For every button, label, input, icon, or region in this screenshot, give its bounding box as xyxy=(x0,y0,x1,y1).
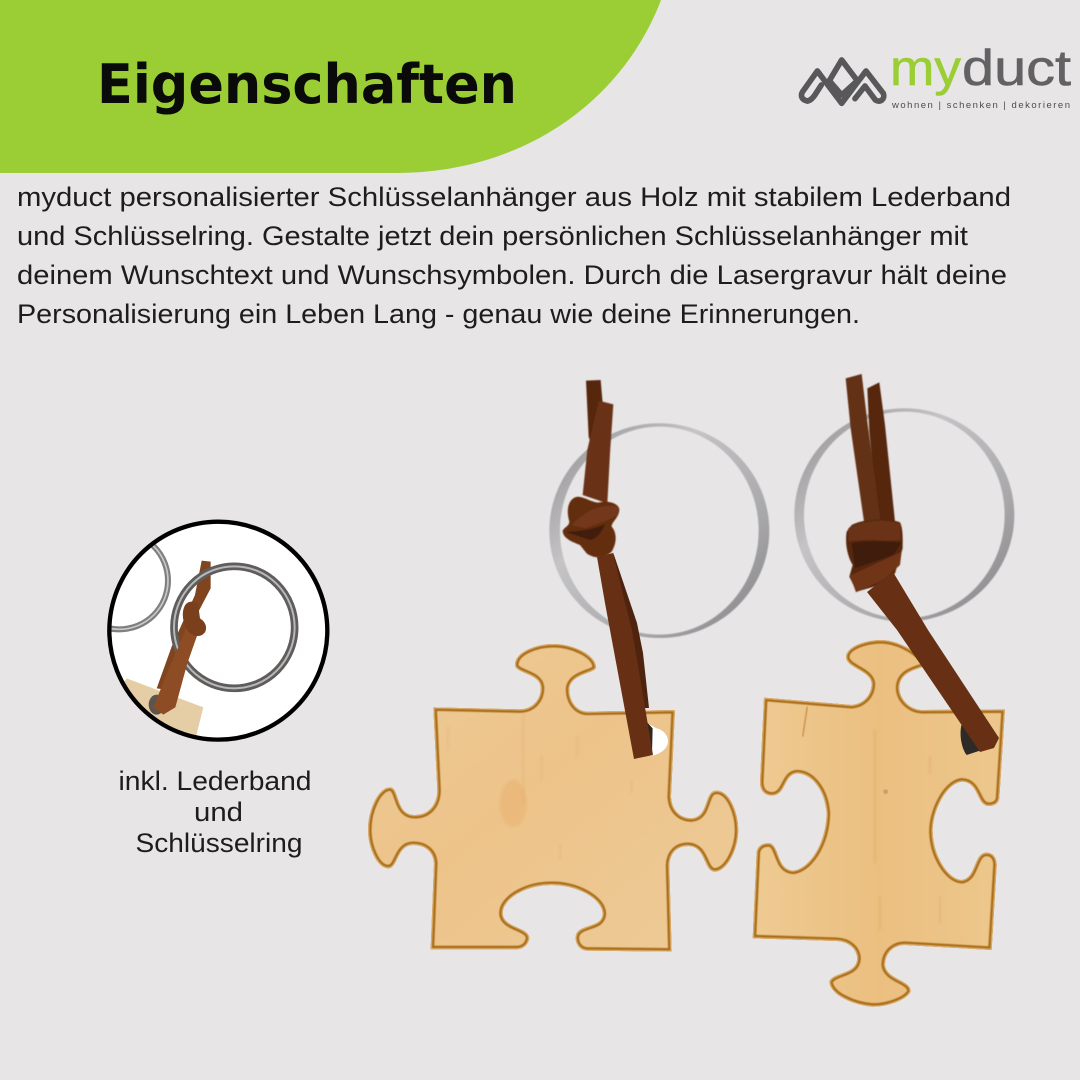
inset strap back xyxy=(157,561,211,690)
right strap behind puzzle xyxy=(885,580,955,706)
right strap front xyxy=(867,572,999,752)
description text: und Schlüsselring. Gestalte jetzt dein persönlichen Schlüsselanhänger mit xyxy=(17,221,969,251)
inset caption: und xyxy=(194,797,243,827)
title: Eigenschaften xyxy=(97,53,517,116)
description text: Personalisierung ein Leben Lang - genau wie deine Erinnerungen. xyxy=(17,299,860,329)
logo wordmark: duct xyxy=(962,40,1071,96)
left strap tails and knot xyxy=(563,380,619,557)
inset strap front xyxy=(153,628,197,715)
logo icon: mountains xyxy=(801,60,884,103)
logo tagline: wohnen | schenken | dekorieren xyxy=(891,100,1070,111)
inset main ring xyxy=(174,566,295,688)
right strap tails and knot xyxy=(846,374,903,592)
right hole xyxy=(961,718,998,755)
left puzzle piece xyxy=(368,644,738,952)
header banner: green shape xyxy=(0,0,661,173)
description text: myduct personalisierter Schlüsselanhänger aus Holz mit stabilem Lederband xyxy=(17,182,1011,212)
description text: deinem Wunschtext und Wunschsymbolen. Durch die Lasergravur hält deine xyxy=(17,260,1007,290)
left hole xyxy=(645,722,668,756)
inset left ring xyxy=(112,544,171,632)
logo wordmark xyxy=(890,40,1071,96)
left strap behind puzzle xyxy=(613,552,649,708)
right key ring xyxy=(794,408,1014,622)
right puzzle piece xyxy=(753,640,1005,1007)
wood grain xyxy=(448,713,632,860)
inset wood piece xyxy=(124,678,204,736)
inset strap knot xyxy=(183,602,206,636)
logo: myduct xyxy=(801,40,1071,111)
description text xyxy=(17,182,1011,329)
inset wood hole xyxy=(148,694,161,715)
inset caption: inkl. Lederband xyxy=(118,766,312,796)
left key ring xyxy=(549,423,769,638)
keychain right: puzzle piece with strap and ring xyxy=(753,374,1014,1007)
keychain left: puzzle piece with strap and ring xyxy=(368,380,769,952)
logo wordmark: my xyxy=(890,40,961,96)
wood grain xyxy=(875,730,940,930)
left strap front xyxy=(597,553,653,759)
inset: detail photo of strap and ring xyxy=(107,520,330,742)
inset caption xyxy=(118,766,312,858)
inset caption: Schlüsselring xyxy=(136,828,302,858)
inset circle border xyxy=(109,522,327,740)
